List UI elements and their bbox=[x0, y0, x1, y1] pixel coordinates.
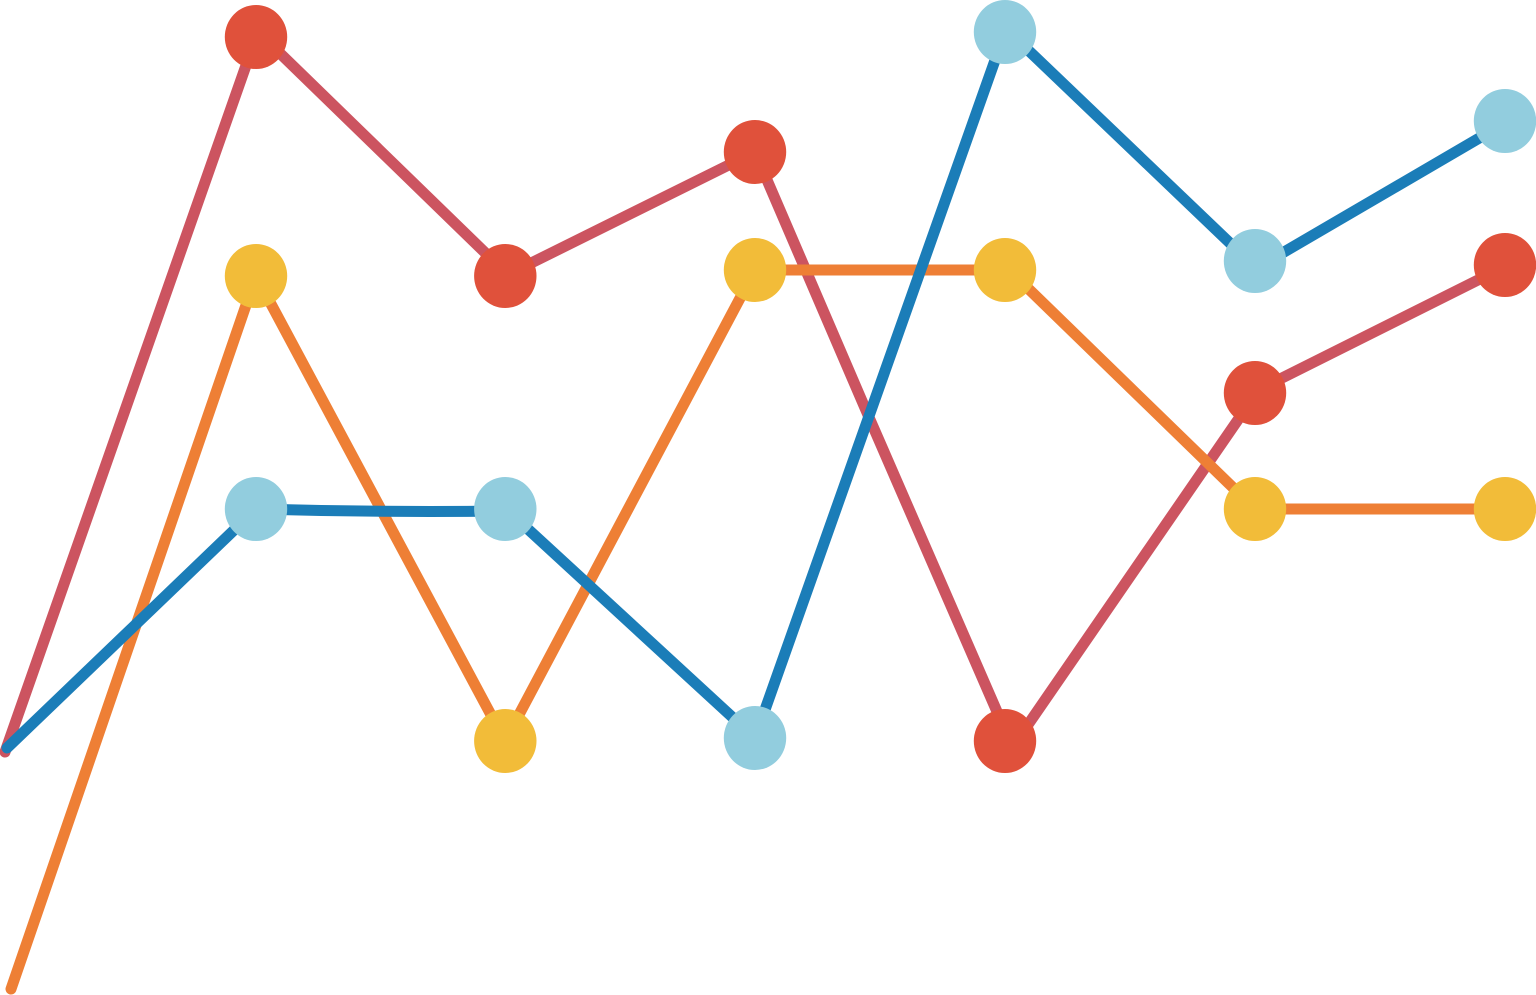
markers: yellow series bbox=[225, 238, 1536, 773]
line: blue series bbox=[7, 28, 1505, 748]
markers: red series bbox=[225, 5, 1536, 773]
markers: light blue series bbox=[225, 0, 1536, 770]
line: orange series bbox=[11, 266, 1505, 989]
line: rose series bbox=[5, 30, 1505, 758]
